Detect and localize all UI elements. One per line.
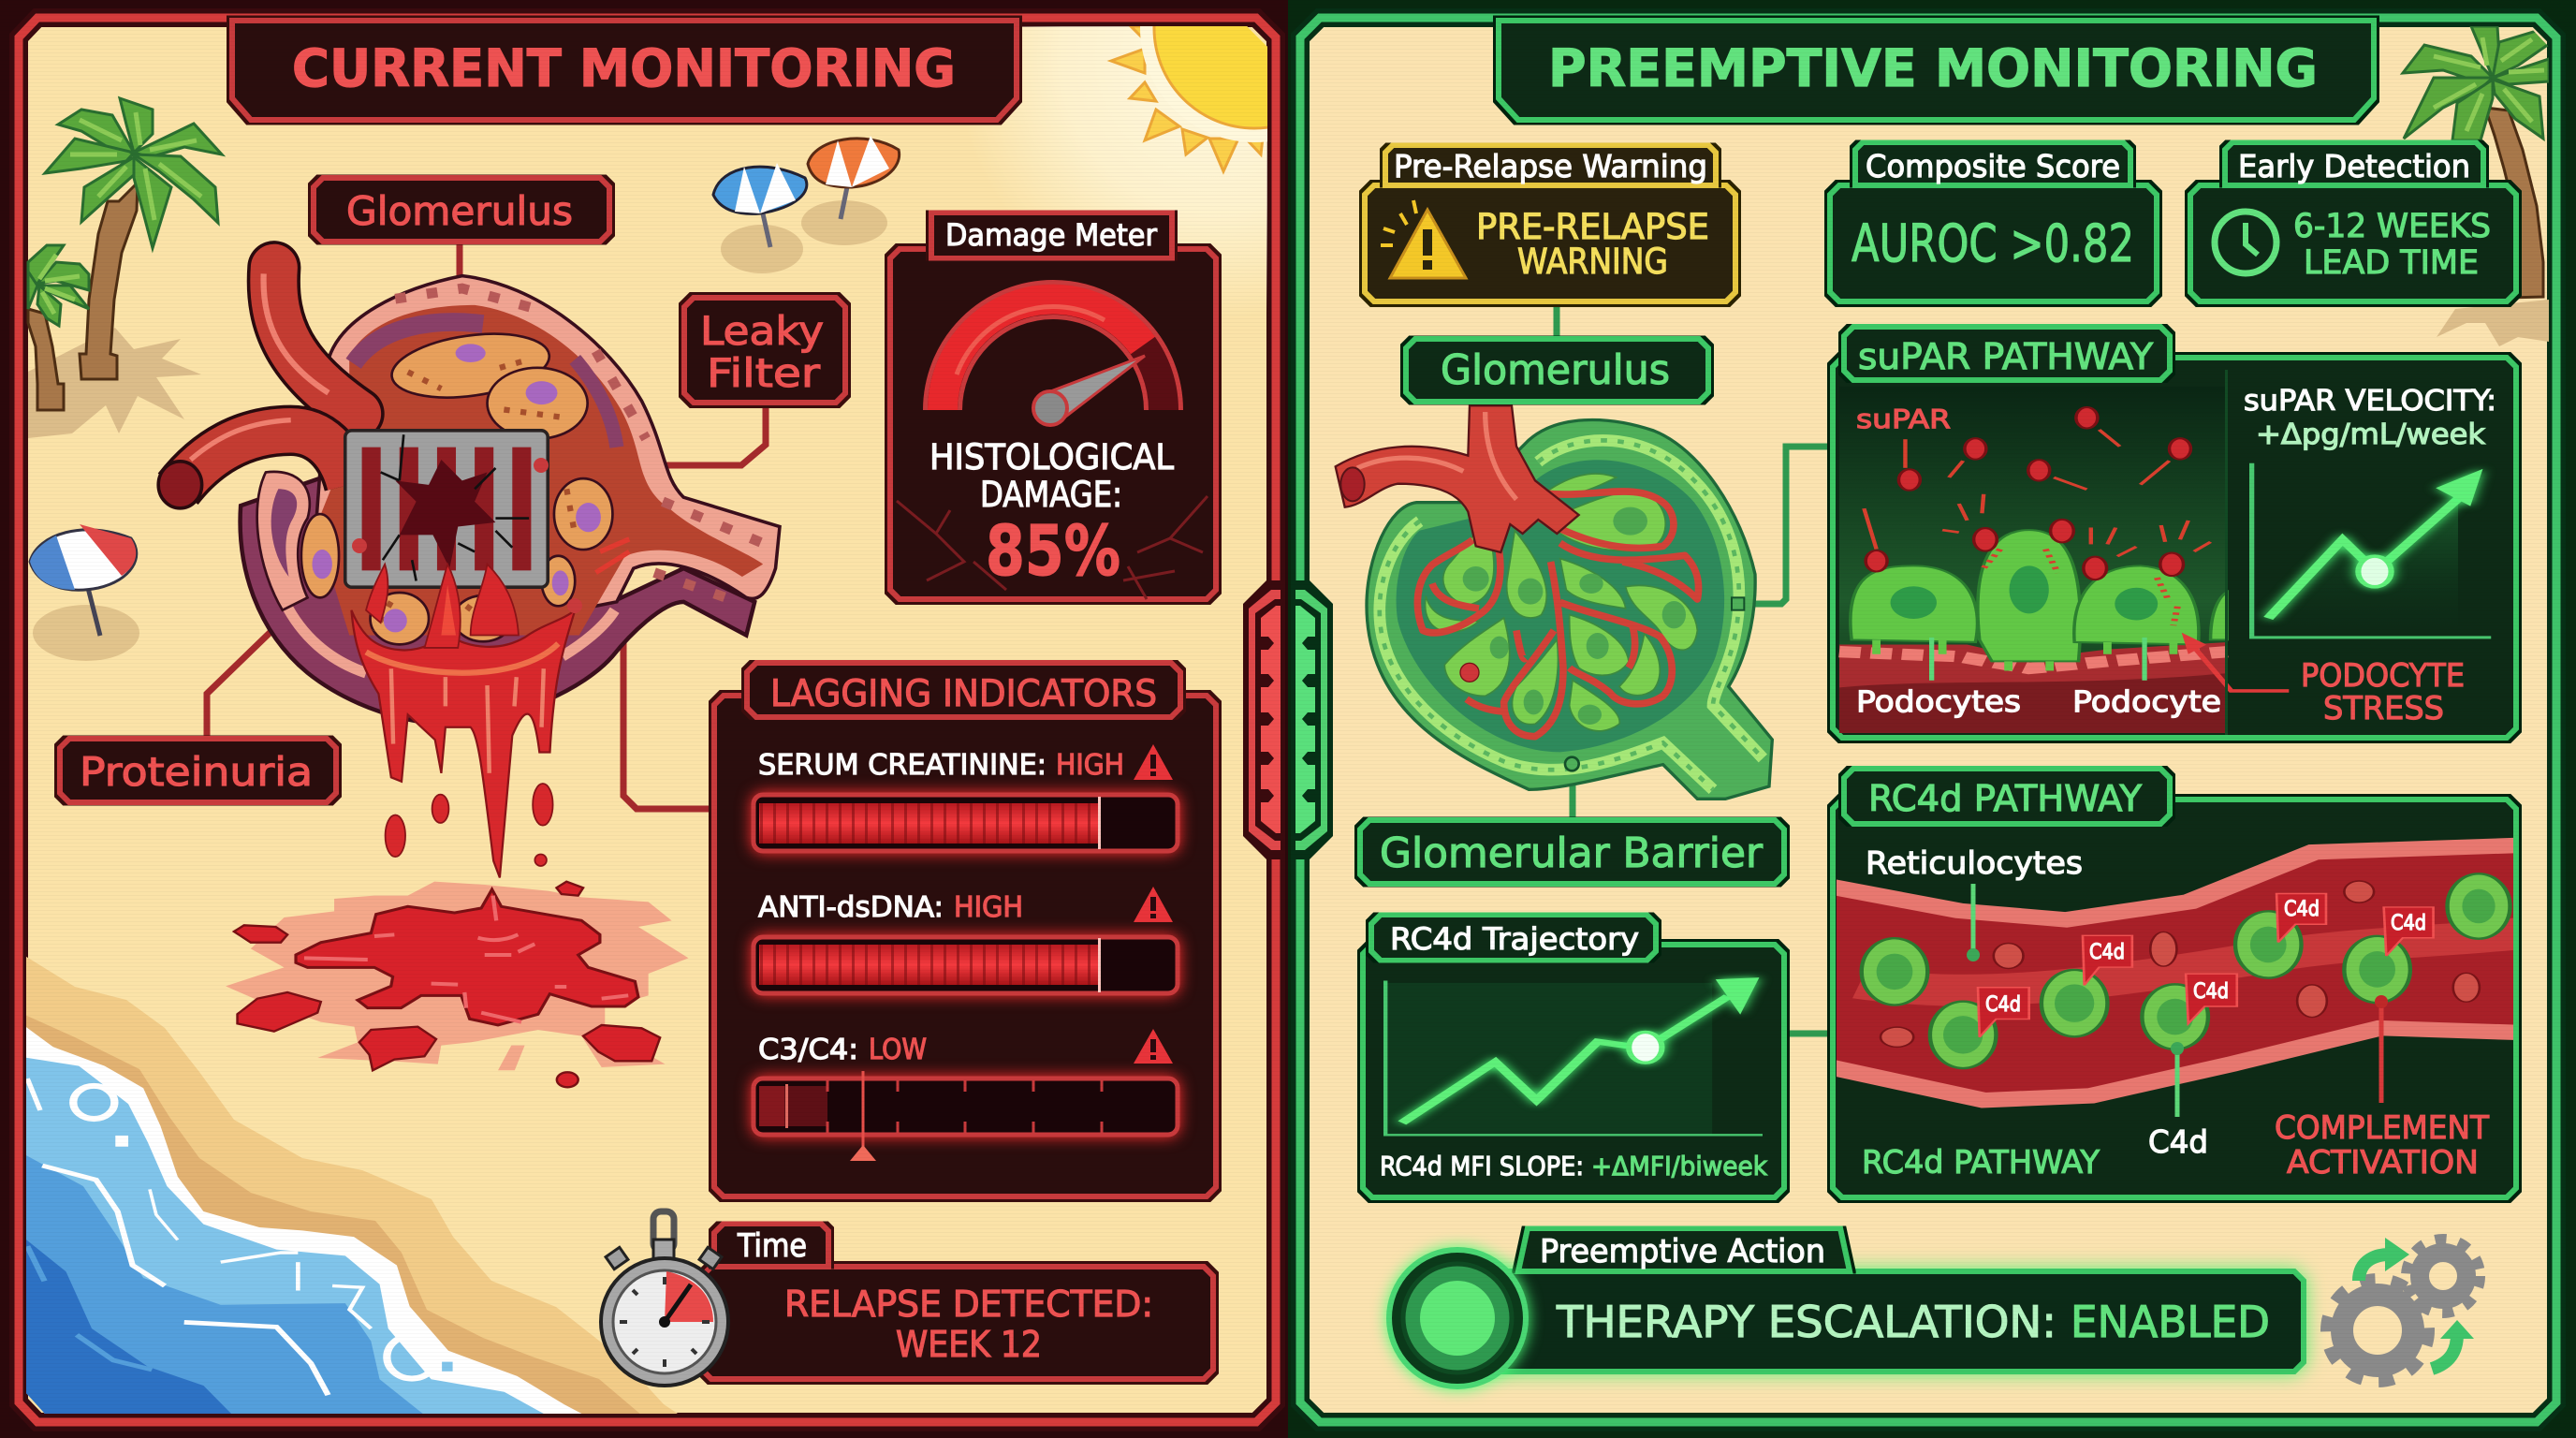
tab: RC4d PATHWAY (1868, 778, 2143, 819)
title: current monitoring: CURRENT MONITORING (292, 38, 956, 98)
icon: warning triangle (1381, 200, 1466, 278)
label: glomerulus (1406, 339, 1708, 402)
label: leaky filter: Leaky (700, 308, 824, 354)
panel: time / relapse detected (702, 1224, 1213, 1379)
panel: RC4d trajectory (1363, 915, 1784, 1197)
panel: RC4d pathway: C4d (2148, 1123, 2208, 1160)
beach and ocean (19, 952, 681, 1420)
reticulocytes (1862, 873, 2510, 1068)
panel: lagging indicators (714, 663, 1216, 1196)
podocyte cells (301, 325, 612, 644)
C4d tags: C4d (2193, 980, 2229, 1004)
panel: suPAR pathway: PODOCYTE (2301, 657, 2465, 695)
C4d tags: C4d (1985, 993, 2021, 1017)
palm tree right (2403, 26, 2549, 346)
icon: gears and arrows (2328, 1238, 2480, 1380)
C4d tags: C4d (2089, 941, 2125, 964)
panel: early detection: LEAD TIME (2304, 244, 2479, 282)
icon: stopwatch (601, 1211, 728, 1386)
connector lines left (207, 243, 766, 809)
title: current monitoring (232, 21, 1017, 120)
illustration: damaged glomerulus (158, 268, 780, 877)
panel: suPAR pathway: suPAR VELOCITY: (2244, 385, 2496, 418)
panel: damage meter (890, 213, 1216, 599)
tab: Early Detection (2238, 148, 2470, 184)
panel: suPAR pathway (1833, 327, 2516, 738)
C4d tags: C4d (2391, 912, 2426, 935)
blood vessel (1827, 845, 2520, 1100)
small palm fronds (28, 245, 89, 326)
panel: damage meter: HISTOLOGICAL (929, 437, 1174, 477)
interior tissue (315, 305, 763, 636)
sand background right (1300, 18, 2556, 1422)
panel: suPAR pathway: suPAR (1856, 404, 1951, 434)
label: proteinuria: Proteinuria (80, 749, 313, 795)
panel: RC4d pathway (1827, 769, 2520, 1197)
panel: pre-relapse warning (1365, 145, 1735, 301)
panel: composite score: AUROC >0.82 (1852, 213, 2134, 273)
title: preemptive monitoring: PREEMPTIVE MONITORING (1548, 38, 2318, 98)
capillaries (1417, 492, 1699, 737)
gauge (943, 300, 1164, 425)
lobes (1426, 474, 1697, 731)
cracks (897, 496, 1208, 599)
row: C3/C4 (754, 1029, 1178, 1161)
tab: Time (737, 1227, 807, 1265)
panel: RC4d pathway: RC4d PATHWAY (1862, 1144, 2100, 1181)
water (19, 1021, 594, 1420)
label: glomerular barrier: Glomerular Barrier (1380, 829, 1764, 877)
leader lines (1967, 884, 2388, 1117)
panel: preemptive action: ENABLED (2071, 1297, 2270, 1347)
blood drops (386, 784, 553, 866)
panel: pre-relapse warning: PRE-RELAPSE (1476, 207, 1709, 247)
tab: suPAR PATHWAY (1858, 336, 2154, 377)
panel: early detection: 6-12 WEEKS (2293, 208, 2491, 245)
panel: preemptive action: THERAPY ESCALATION: (1556, 1297, 2056, 1347)
panel: pre-relapse warning: WARNING (1517, 242, 1668, 282)
suPAR molecules (1866, 407, 2190, 580)
tab (714, 1224, 828, 1267)
label: glomerulus: Glomerulus (1441, 346, 1670, 394)
outer purple capsule (241, 468, 754, 724)
fronds (2403, 26, 2549, 140)
sun (988, 26, 1267, 307)
panel: early detection (2190, 142, 2516, 301)
panel: RC4d pathway: ACTIVATION (2287, 1144, 2479, 1181)
panel: suPAR pathway: Podocyte (2072, 685, 2221, 719)
panel: current monitoring (9, 8, 1285, 1431)
panel: time / relapse detected: RELAPSE DETECTED: (784, 1284, 1153, 1325)
label: glomerular barrier (1360, 820, 1784, 884)
capsule inner (1397, 460, 1724, 752)
row: serum creatinine: HIGH (1056, 749, 1124, 782)
lower pink rim (285, 602, 615, 673)
row: serum creatinine: SERUM CREATININE: (758, 749, 1046, 782)
lobe nuclei (1463, 507, 1686, 725)
C4d tags (1978, 893, 2434, 1037)
panel: suPAR pathway: +Δpg/mL/week (2256, 418, 2486, 451)
tab (1371, 915, 1656, 961)
panel: damage meter: 85% (986, 511, 1120, 592)
panel: suPAR pathway: Podocytes (1856, 685, 2021, 719)
panel: RC4d trajectory: RC4d MFI SLOPE: (1380, 1151, 1584, 1181)
panel: time / relapse detected: WEEK 12 (896, 1324, 1042, 1365)
tab: Composite Score (1866, 148, 2120, 184)
basement membrane (1839, 642, 2227, 733)
C4d tags: C4d (2284, 898, 2320, 921)
arterioles (273, 268, 358, 414)
panel: RC4d pathway: COMPLEMENT (2275, 1109, 2489, 1147)
panel: composite score (1830, 142, 2157, 301)
small red cells (1881, 881, 2480, 1047)
connector lines right (1557, 303, 1831, 1034)
panel: RC4d trajectory: +ΔMFI/biweek (1591, 1151, 1768, 1181)
tab (1844, 327, 2170, 380)
row: serum creatinine (754, 744, 1178, 851)
icon: puddle of blood (226, 882, 689, 1087)
row: C3/C4: LOW (869, 1034, 927, 1066)
pink wall speckles (395, 288, 763, 602)
panel: preemptive action (1498, 1228, 2304, 1372)
panel: RC4d pathway: Reticulocytes (1866, 844, 2083, 881)
icon: clock (2215, 212, 2276, 273)
podocytes (1851, 530, 2227, 661)
center connector: green (1295, 580, 1333, 859)
tab: Pre-Relapse Warning (1394, 148, 1707, 184)
suPAR sparks (1864, 430, 2211, 625)
leaking blood (351, 610, 575, 877)
palm trees left (28, 98, 222, 438)
outer capsule (1367, 420, 1772, 799)
row: C3/C4: C3/C4: (758, 1034, 858, 1066)
podocyte scene (1839, 387, 2289, 733)
tab: Damage Meter (945, 217, 1158, 253)
icon: glowing button (1389, 1250, 1526, 1387)
label: leaky filter (684, 298, 845, 403)
cell nuclei (312, 344, 601, 632)
row: anti-dsDNA: ANTI-dsDNA: (758, 891, 944, 924)
tab: RC4d Trajectory (1390, 921, 1639, 957)
row: anti-dsDNA: HIGH (954, 891, 1023, 924)
title: preemptive monitoring (1499, 21, 2374, 120)
connector nodes (1565, 757, 1579, 770)
pink wall (315, 276, 780, 610)
connector dots (352, 458, 582, 613)
line chart (1385, 977, 1763, 1135)
broken filter grate (345, 431, 548, 587)
tab (1844, 769, 2170, 824)
arterioles (1336, 405, 1579, 552)
illustration: healthy glomerulus (1336, 405, 1772, 799)
label: glomerulus: Glomerulus (346, 188, 573, 234)
left pink pocket (257, 472, 310, 610)
row: anti-dsDNA (754, 887, 1178, 993)
label: leaky filter: Filter (707, 350, 821, 396)
panel: damage meter: DAMAGE: (980, 475, 1122, 515)
center connector: red (1243, 580, 1281, 859)
big palm fronds (45, 98, 222, 248)
capsule light band (1380, 440, 1763, 789)
sand background left (19, 18, 1276, 1422)
label: glomerulus (314, 178, 609, 242)
tab: Preemptive Action (1540, 1233, 1825, 1270)
panel: suPAR pathway: STRESS (2323, 690, 2444, 727)
heading tab: LAGGING INDICATORS (770, 673, 1157, 715)
panel: preemptive monitoring (1295, 18, 2556, 1422)
chart: suPAR velocity (2252, 463, 2491, 638)
label: proteinuria (60, 739, 336, 802)
beach umbrellas (30, 136, 900, 661)
cell texture (374, 360, 575, 631)
